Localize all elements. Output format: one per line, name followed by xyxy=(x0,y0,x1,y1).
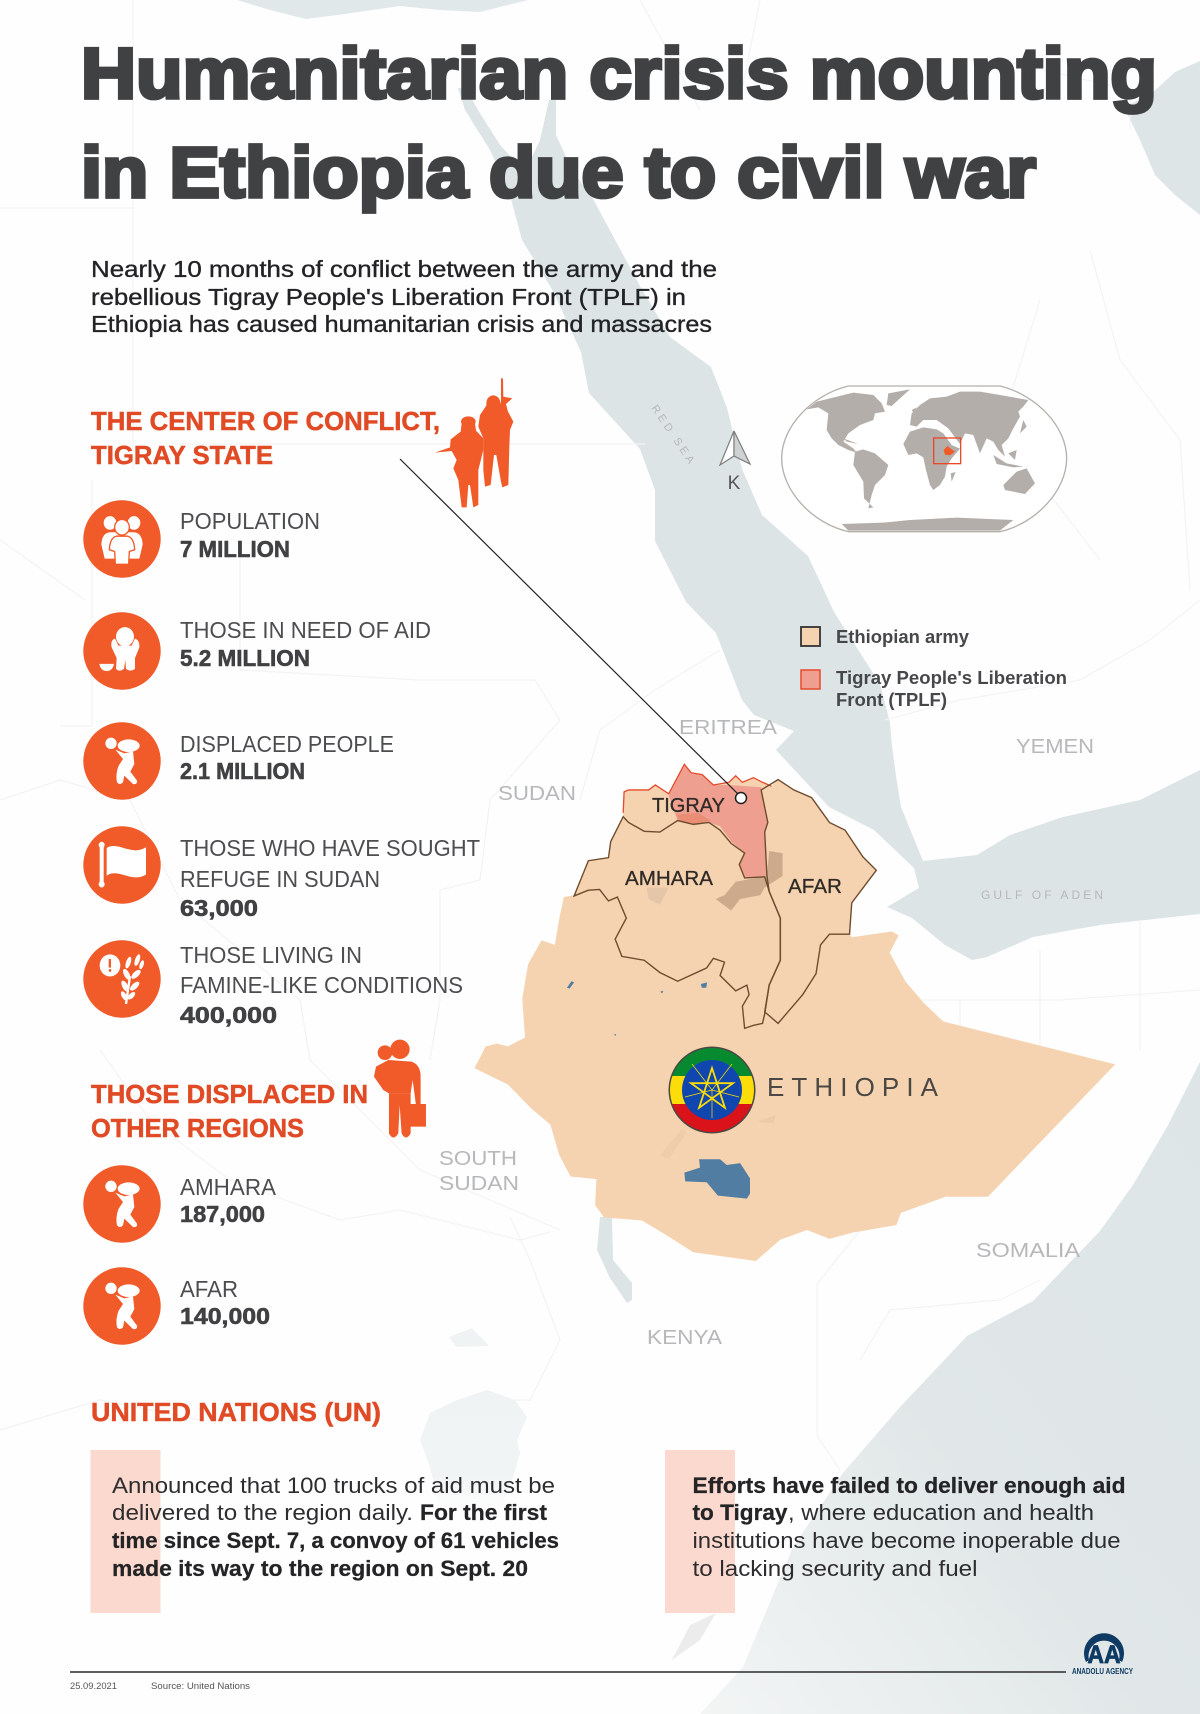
panel: UN failed aid note: , where education and health xyxy=(788,1500,1094,1525)
stat: Afar: AFAR xyxy=(180,1276,238,1302)
Ethiopian flag emblem xyxy=(668,1046,756,1134)
intro text: rebellious Tigray People's Liberation Front (TPLF) in xyxy=(91,284,686,310)
sea: Mediterranean xyxy=(237,0,528,19)
stat: Amhara: 187,000 xyxy=(180,1201,265,1227)
panel: UN trucks note: delivered to the region daily. xyxy=(112,1500,413,1525)
region and country labels: TIGRAY xyxy=(652,795,725,817)
heading: United Nations: UNITED NATIONS (UN) xyxy=(91,1397,381,1427)
intro text xyxy=(91,256,717,337)
region: Tigray xyxy=(669,764,768,878)
panel: UN trucks note: time since Sept. 7, a convoy of 61 vehicles xyxy=(112,1528,559,1553)
region and country labels: ETHIOPIA xyxy=(767,1072,939,1102)
region and country labels: KENYA xyxy=(647,1327,723,1349)
title: Humanitarian crisis mounting xyxy=(81,35,1157,114)
region and country labels: RED SEA xyxy=(649,403,697,467)
intro text: Nearly 10 months of conflict between the army and the xyxy=(91,256,717,282)
country fill xyxy=(475,764,1115,1261)
stat: sought refuge in Sudan: REFUGE IN SUDAN xyxy=(180,866,380,892)
stat: those in need of aid xyxy=(83,612,431,690)
footer date and source: 25.09.2021 xyxy=(70,1681,117,1691)
map of Ethiopia xyxy=(475,764,1115,1261)
stat: famine-like conditions xyxy=(83,940,463,1028)
leader line to Tigray xyxy=(400,459,746,804)
stat: Afar xyxy=(83,1267,270,1345)
lake: Turkana xyxy=(597,1217,632,1303)
sea: Red Sea and Gulf of Aden xyxy=(458,88,1200,960)
stat: sought refuge in Sudan: 63,000 xyxy=(180,895,258,921)
Amhara border xyxy=(574,817,780,1028)
icon: person carrying sack xyxy=(105,1283,140,1329)
icon: group of people xyxy=(101,516,143,564)
stat: displaced people: 2.1 MILLION xyxy=(180,758,305,784)
intro text: Ethiopia has caused humanitarian crisis and massacres xyxy=(91,311,712,337)
Anadolu Agency logo: AA xyxy=(1088,1641,1120,1669)
region and country labels: GULF OF ADEN xyxy=(981,888,1103,902)
stat: displaced people xyxy=(83,722,394,800)
stat: famine-like conditions: THOSE LIVING IN xyxy=(180,942,362,968)
stat: famine-like conditions: 400,000 xyxy=(180,1002,277,1028)
panel: UN trucks note: made its way to the region on Sept. 20 xyxy=(112,1556,528,1581)
footer rule xyxy=(70,1671,1066,1673)
lakes in Ethiopia xyxy=(567,981,750,1199)
stat: displaced people: DISPLACED PEOPLE xyxy=(180,731,394,757)
icon: warning and wheat xyxy=(100,954,145,1004)
legend: Tigray People's Liberation xyxy=(836,668,1067,688)
region and country labels: YEMEN xyxy=(1016,736,1094,758)
stat: those in need of aid: 5.2 MILLION xyxy=(180,645,310,671)
heading: displaced in other regions: OTHER REGIONS xyxy=(91,1113,304,1143)
icon: person carrying sack xyxy=(105,738,140,784)
panel: UN failed aid note xyxy=(665,1450,1126,1613)
Afar border xyxy=(761,780,876,1023)
stat: population: 7 MILLION xyxy=(180,536,290,562)
stat: sought refuge in Sudan: THOSE WHO HAVE SOUGHT xyxy=(180,835,480,861)
stat: Amhara: AMHARA xyxy=(180,1174,277,1200)
footer date and source: Source: United Nations xyxy=(151,1681,251,1691)
heading: center of conflict xyxy=(91,406,440,470)
title: in Ethiopia due to civil war xyxy=(81,134,1036,213)
region and country labels: ERITREA xyxy=(679,717,778,739)
stat: Afar: 140,000 xyxy=(180,1303,270,1329)
icon: flag xyxy=(99,842,146,887)
icon: seated person with bowl xyxy=(99,627,139,671)
stat: population xyxy=(83,500,320,578)
north arrow: K xyxy=(728,473,741,494)
stat: Amhara xyxy=(83,1165,277,1243)
panel: UN trucks note: Announced that 100 trucks of aid must be xyxy=(112,1473,555,1498)
region and country labels xyxy=(439,403,1103,1349)
land relief: Rift highlands xyxy=(672,1613,716,1660)
Tigray border xyxy=(623,764,771,813)
panel: UN trucks note xyxy=(90,1450,559,1613)
panel: UN failed aid note: Efforts have failed to deliver enough aid xyxy=(692,1473,1126,1498)
panel: UN trucks note: For the first xyxy=(420,1500,548,1525)
footer date and source xyxy=(70,1681,251,1691)
heading: center of conflict: THE CENTER OF CONFLICT, xyxy=(91,406,440,436)
region and country labels: SUDAN xyxy=(498,783,576,805)
region and country labels: SOUTH xyxy=(439,1148,517,1170)
north arrow xyxy=(720,431,750,494)
sea: Persian Gulf xyxy=(1124,61,1200,215)
stat: population: POPULATION xyxy=(180,508,320,534)
title xyxy=(81,35,1157,213)
region and country labels: AMHARA xyxy=(625,868,714,890)
world locator map xyxy=(782,386,1067,532)
Anadolu Agency logo xyxy=(1072,1633,1133,1676)
region and country labels: SUDAN xyxy=(439,1173,519,1195)
Anadolu Agency logo: ANADOLU AGENCY xyxy=(1072,1666,1133,1676)
relief: Tekeze and Afar highlands xyxy=(716,851,783,910)
sea: Indian Ocean xyxy=(700,1062,1200,1714)
legend xyxy=(801,627,1067,710)
region and country labels: SOMALIA xyxy=(976,1240,1081,1262)
lake: Kyoga xyxy=(449,1328,489,1347)
stat: famine-like conditions: FAMINE-LIKE CONDITIONS xyxy=(180,972,463,998)
icon: adult with child and suitcase xyxy=(374,1040,426,1137)
heading: displaced in other regions: THOSE DISPLACED IN xyxy=(91,1079,368,1109)
panel: UN failed aid note: institutions have become inoperable due xyxy=(692,1528,1120,1553)
legend: Front (TPLF) xyxy=(836,690,947,710)
icon: person carrying sack xyxy=(105,1181,140,1227)
panel: UN failed aid note: to lacking security and fuel xyxy=(692,1556,978,1581)
heading: displaced in other regions xyxy=(91,1079,368,1143)
heading: center of conflict: TIGRAY STATE xyxy=(91,440,273,470)
stat: those in need of aid: THOSE IN NEED OF AID xyxy=(180,617,431,643)
legend: Ethiopian army xyxy=(836,627,969,647)
icon: soldiers xyxy=(435,378,513,507)
stat: sought refuge in Sudan xyxy=(83,826,480,921)
lake: Victoria xyxy=(420,1390,527,1510)
panel: UN failed aid note: to Tigray xyxy=(692,1500,788,1525)
region and country labels: AFAR xyxy=(788,876,842,898)
